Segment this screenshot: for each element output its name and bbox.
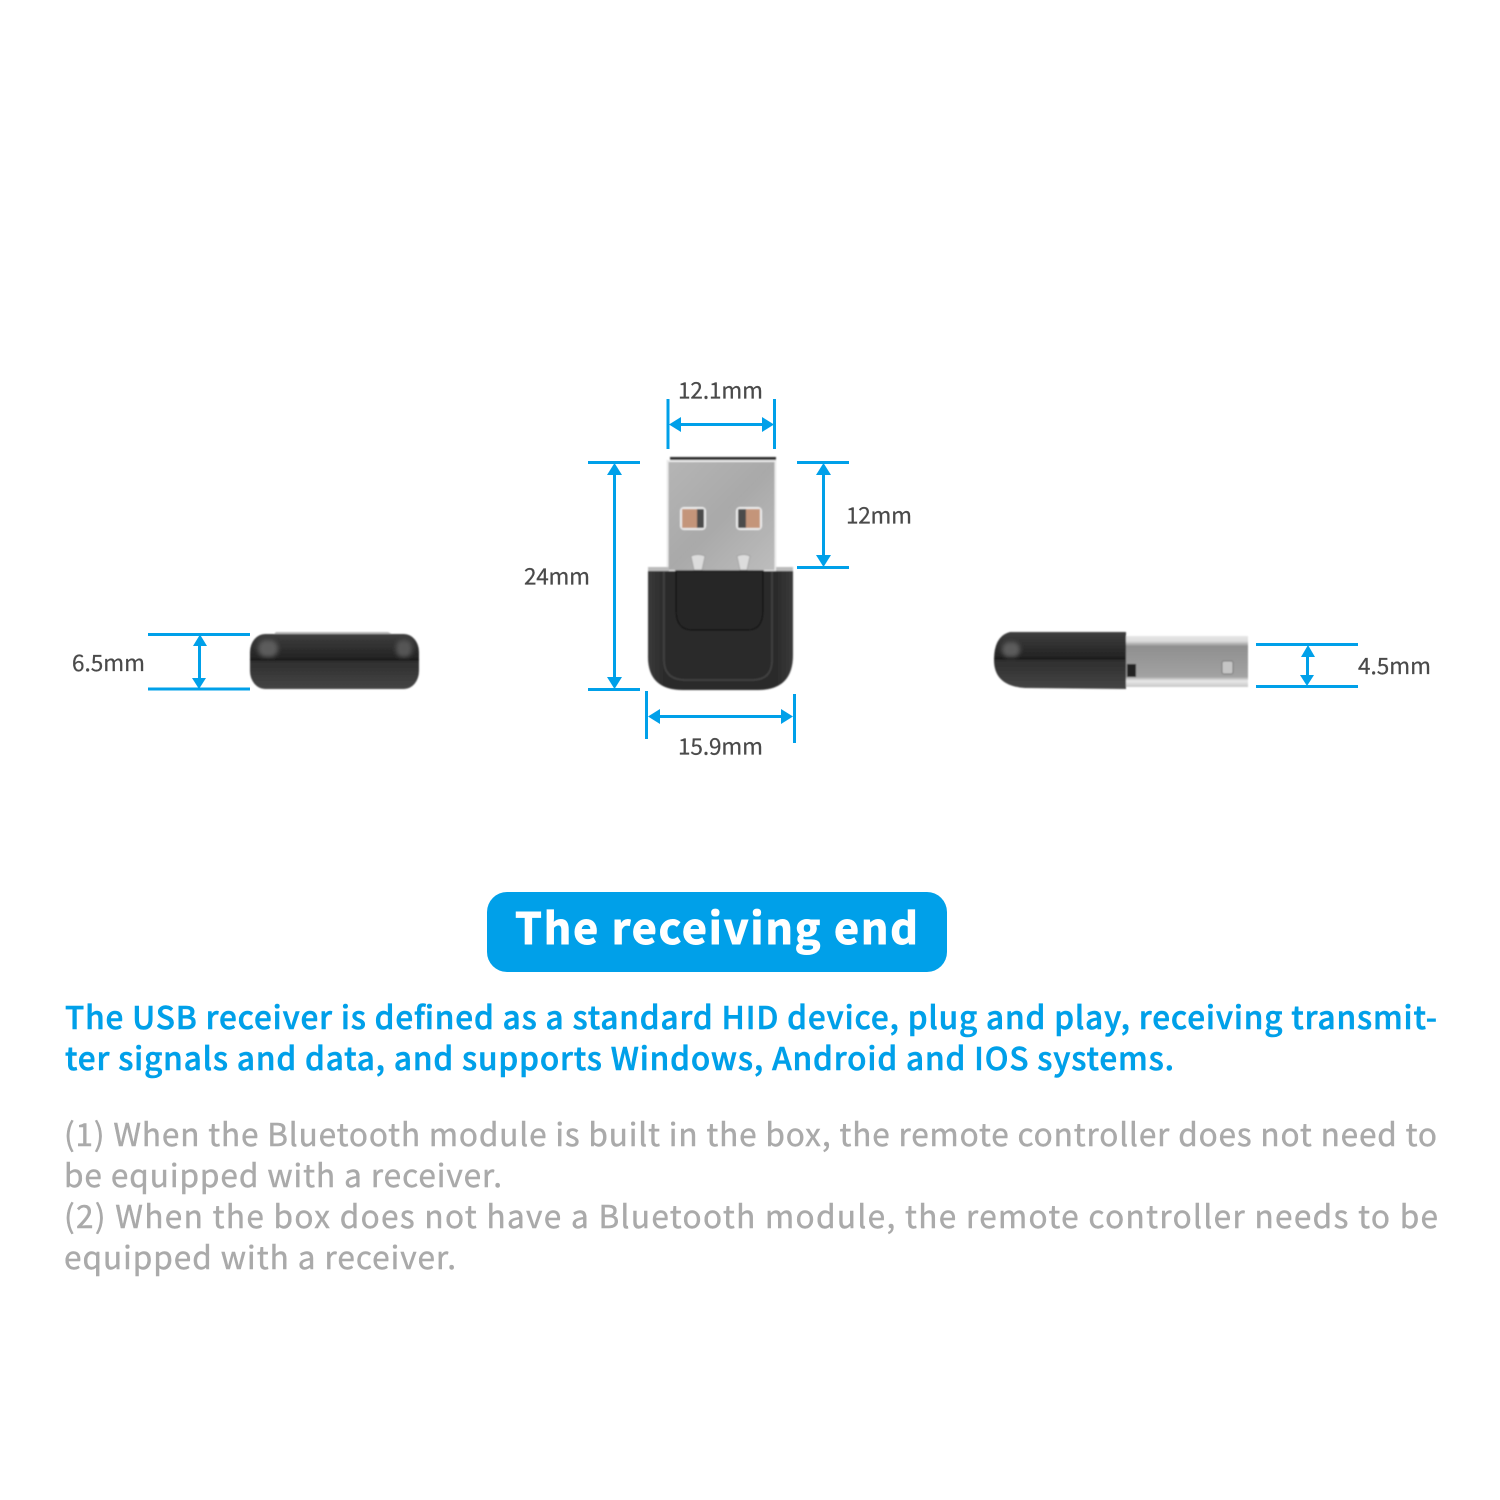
text block: blue description (65, 993, 1437, 1080)
text block: gray notes: (1) When the Bluetooth module is built in the box, the remote controller does not need to (64, 1110, 1437, 1156)
text block: blue description: ter signals and data, and supports Windows, Android and IOS systems. (65, 1034, 1174, 1080)
dimension: 12mm height (797, 462, 912, 568)
text block: gray notes: (2) When the box does not have a Bluetooth module, the remote controller needs to be (64, 1192, 1438, 1238)
dimension: 24mm height (524, 462, 640, 690)
text block: gray notes (64, 1110, 1438, 1279)
icon: USB receiver side view, right (994, 632, 1248, 689)
icon: USB receiver front view, center (648, 457, 793, 690)
dimension: 4.5mm height (1256, 644, 1431, 686)
dimension: 6.5mm height (72, 634, 250, 689)
text block: gray notes: equipped with a receiver. (64, 1233, 456, 1279)
dimension: 12.1mm width (668, 374, 774, 449)
text block: blue description: The USB receiver is defined as a standard HID device, plug and play, receiving transmit- (65, 993, 1437, 1039)
heading badge: The receiving end: The receiving end (515, 895, 918, 957)
dimension: 6.5mm height: 6.5mm (72, 646, 145, 678)
dimension: 15.9mm width (646, 691, 794, 762)
dimension: 4.5mm height: 4.5mm (1358, 649, 1431, 681)
icon: USB receiver side view, left (250, 632, 419, 689)
dimension: 12mm height: 12mm (846, 498, 912, 530)
dimension: 24mm height: 24mm (524, 560, 590, 592)
heading badge: The receiving end (487, 892, 947, 972)
text block: gray notes: be equipped with a receiver. (64, 1151, 502, 1197)
dimension: 12.1mm width: 12.1mm (678, 374, 763, 406)
dimension: 15.9mm width: 15.9mm (678, 730, 763, 762)
